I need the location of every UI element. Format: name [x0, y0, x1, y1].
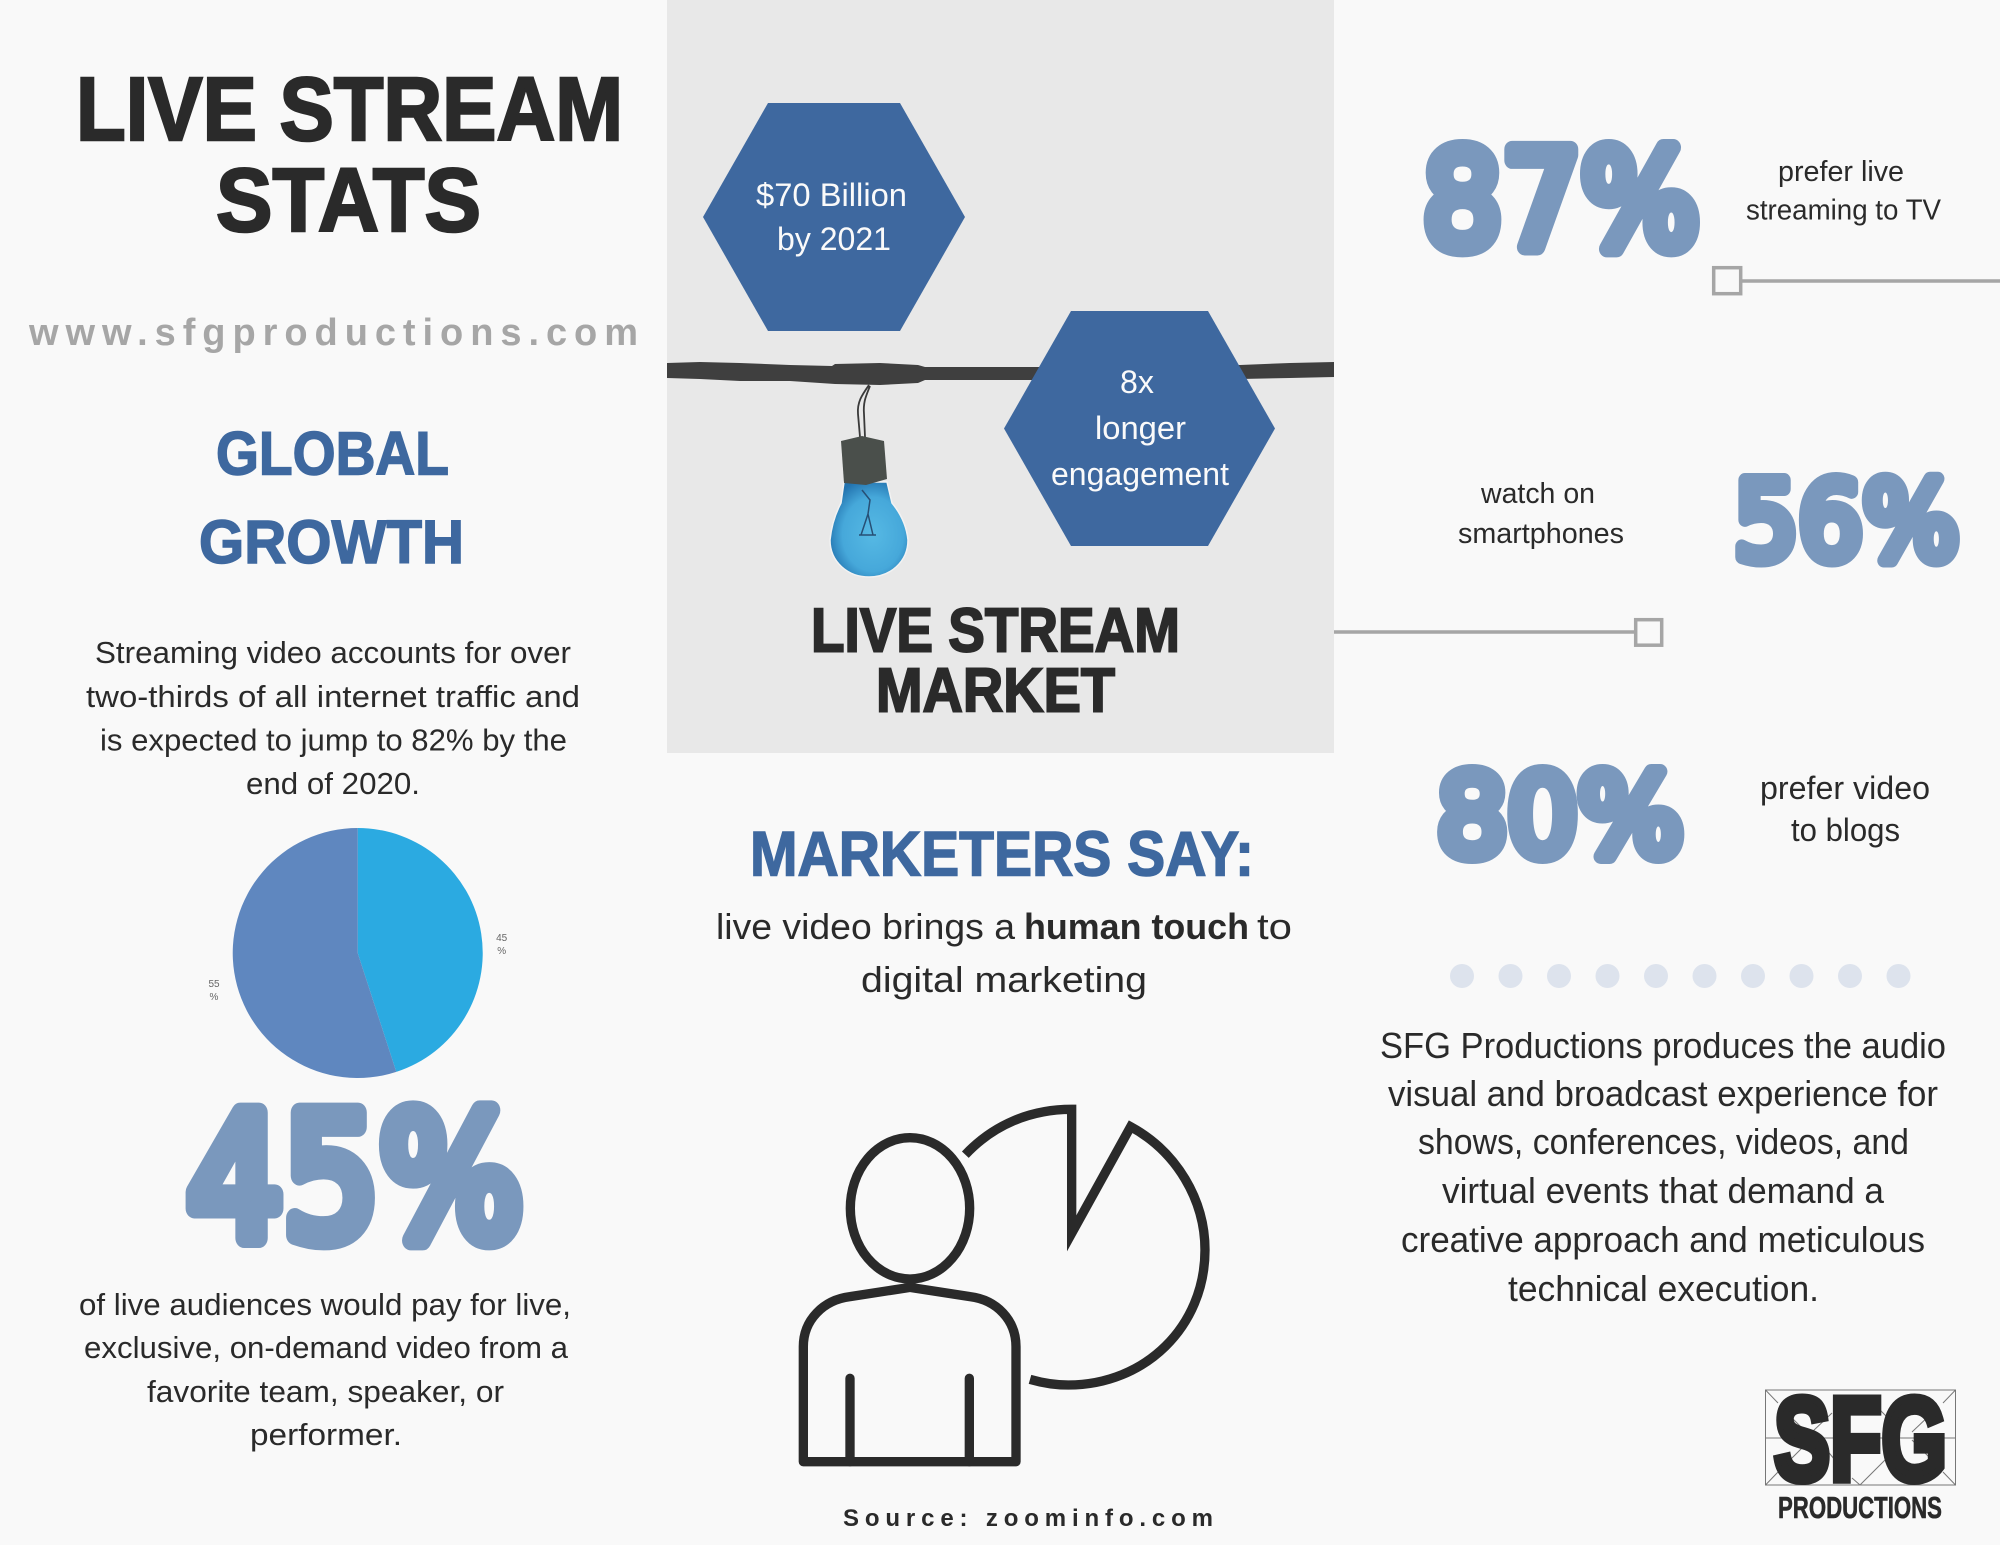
hexagon: market size: by 2021	[777, 221, 891, 257]
text block: about SFG: shows, conferences, videos, and	[1418, 1121, 1909, 1162]
text block: streaming share: Streaming video accounts for over	[95, 635, 571, 670]
pie chart: 55	[208, 979, 220, 990]
heading: marketers say: MARKETERS SAY:	[750, 820, 1254, 890]
hexagon: market size	[703, 103, 965, 331]
label: prefer live streaming: streaming to TV	[1746, 194, 1942, 226]
hexagon: engagement: engagement	[1051, 456, 1229, 492]
text block: about SFG: technical execution.	[1508, 1268, 1819, 1309]
big stat: 87%: 87%	[1423, 123, 1699, 279]
label: watch on smartphones: smartphones	[1458, 518, 1624, 550]
text block: about SFG	[1380, 1025, 1946, 1309]
text block: streaming share	[86, 635, 580, 801]
text block: streaming share: two-thirds of all internet traffic and	[86, 679, 580, 714]
text block: live audiences	[79, 1287, 571, 1452]
text block: live audiences: favorite team, speaker, or	[147, 1374, 504, 1409]
panel heading	[811, 596, 1180, 726]
text block: about SFG: SFG Productions produces the audio	[1380, 1025, 1946, 1066]
big stat: 56%: 56%	[1734, 460, 1959, 585]
label: watch on smartphones: watch on	[1480, 478, 1595, 510]
heading: global growth: GROWTH	[199, 508, 464, 576]
text block: live audiences: performer.	[250, 1417, 402, 1452]
text block: live audiences: exclusive, on-demand video from a	[84, 1330, 569, 1365]
text block: human touch: human touch	[1024, 906, 1249, 947]
big stat: 80%: 80%	[1437, 752, 1683, 882]
label: prefer live streaming: prefer live	[1778, 156, 1904, 188]
text block: human touch	[716, 906, 1292, 1000]
dot row	[1450, 964, 1910, 988]
label: prefer video to blogs: to blogs	[1791, 812, 1900, 848]
panel heading: MARKET	[876, 656, 1115, 726]
pie chart	[208, 828, 508, 1078]
big stat: 45%: 45%	[187, 1078, 523, 1279]
text block: about SFG: virtual events that demand a	[1442, 1170, 1885, 1211]
text block: human touch: live video brings a	[716, 906, 1016, 947]
heading: global growth	[199, 420, 464, 576]
text block: streaming share: end of 2020.	[246, 766, 420, 801]
icon: person with pie chart	[803, 1109, 1205, 1462]
text block: about SFG: creative approach and meticulous	[1401, 1219, 1925, 1260]
text block: human touch: digital marketing	[861, 959, 1147, 1000]
connector: top	[1714, 268, 2000, 294]
hexagon: market size: $70 Billion	[756, 177, 907, 213]
pie chart: %	[497, 946, 506, 957]
panel heading: LIVE STREAM	[811, 596, 1180, 666]
label: prefer video to blogs	[1760, 770, 1930, 848]
connector: middle	[1334, 620, 1662, 645]
icon: hanging light bulb	[830, 385, 908, 577]
title	[76, 60, 623, 251]
text block: streaming share: is expected to jump to 82% by the	[100, 722, 567, 758]
title: LIVE STREAM	[76, 60, 623, 160]
hexagon: engagement: longer	[1095, 410, 1186, 446]
hexagon: engagement	[1004, 311, 1275, 546]
source line: Source: zoominfo.com	[843, 1505, 1213, 1532]
label: prefer video to blogs: prefer video	[1760, 770, 1930, 806]
panel: live stream market	[667, 0, 1334, 753]
wire	[667, 362, 1334, 385]
hexagon: engagement: 8x	[1120, 364, 1154, 400]
text block: live audiences: of live audiences would pay for live,	[79, 1287, 571, 1322]
pie chart: 45	[496, 933, 508, 944]
logo: SFG Productions	[1766, 1374, 1956, 1525]
pie chart: %	[210, 992, 219, 1003]
label: watch on smartphones	[1458, 478, 1624, 550]
text block: about SFG: visual and broadcast experience for	[1388, 1073, 1938, 1114]
heading: global growth: GLOBAL	[216, 420, 449, 488]
website url: www.sfgproductions.com	[28, 312, 638, 354]
title: STATS	[216, 151, 481, 251]
label: prefer live streaming	[1746, 156, 1942, 226]
text block: human touch: to	[1257, 906, 1292, 947]
